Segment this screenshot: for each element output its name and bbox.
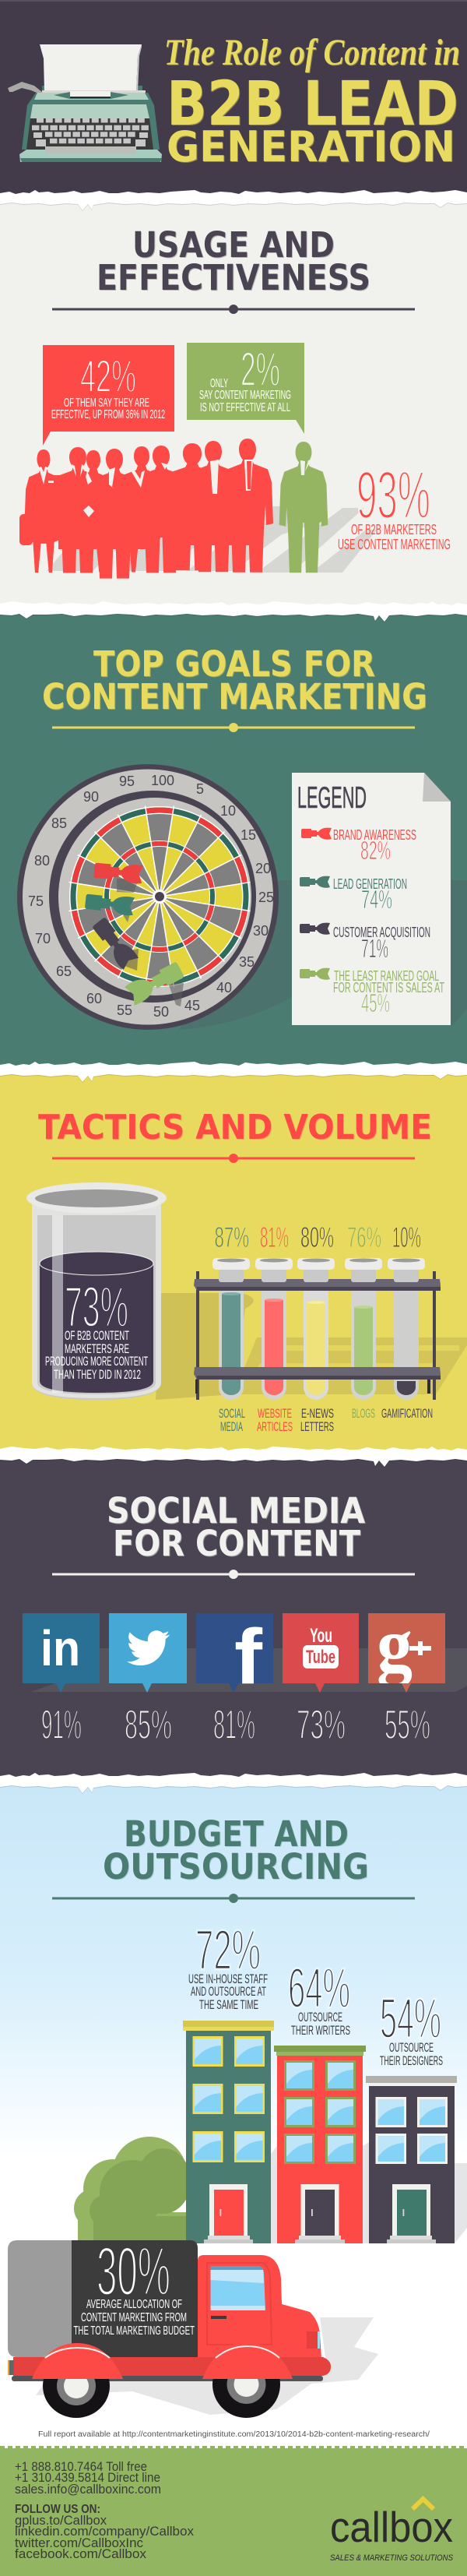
building shadows bbox=[271, 2142, 467, 2243]
contact details: linkedin.com/company/Callbox bbox=[15, 2524, 194, 2539]
heading: usage and effectiveness: EFFECTIVENESS bbox=[97, 257, 370, 298]
crowd shirt details bbox=[39, 449, 253, 517]
dart: green bbox=[124, 959, 185, 1006]
board scale numbers: 100 bbox=[151, 773, 174, 788]
chart labels bbox=[219, 1406, 433, 1434]
bubble: 2 percent: SAY CONTENT MARKETING bbox=[199, 389, 291, 402]
stat: 73 percent bbox=[45, 1276, 148, 1382]
stat: 73 percent: PRODUCING MORE CONTENT bbox=[45, 1354, 148, 1369]
social percentages: 81% bbox=[213, 1702, 255, 1748]
tube necks bbox=[219, 1268, 419, 1282]
stat: 64 percent: THEIR WRITERS bbox=[291, 2024, 350, 2038]
board scale numbers: 45 bbox=[184, 998, 200, 1013]
bubble: 2 percent: ONLY bbox=[210, 377, 228, 390]
legend title: LEGEND bbox=[297, 781, 367, 815]
chart: test tube percentages bbox=[215, 1221, 421, 1253]
stat: 30 percent: 30% bbox=[97, 2232, 170, 2310]
stat: 30 percent: THE TOTAL MARKETING BUDGET bbox=[73, 2324, 195, 2338]
board scale numbers: 25 bbox=[258, 890, 274, 905]
board scale numbers: 75 bbox=[28, 893, 44, 909]
legend item: brand awareness bbox=[301, 827, 416, 865]
legend item: customer acquisition: 71% bbox=[361, 934, 388, 963]
heading: top goals bbox=[42, 643, 427, 717]
panel: budget and outsourcing bbox=[0, 1782, 467, 2452]
board and paper shadow bbox=[179, 880, 467, 1030]
contact details: gplus.to/Callbox bbox=[15, 2513, 107, 2528]
panel: legend bbox=[292, 773, 451, 1025]
stat: 30 percent bbox=[73, 2232, 195, 2338]
icon: facebook bbox=[196, 1613, 273, 1700]
bubble: 2 percent bbox=[187, 343, 304, 434]
board scale numbers: 10 bbox=[220, 803, 236, 819]
contact details: FOLLOW US ON: bbox=[15, 2503, 100, 2516]
stat: 73 percent: 73% bbox=[65, 1276, 128, 1339]
source note: Full report available at http://contentmarketinginstitute.com/2013/10/2014-b2b-content-marketing-research/ bbox=[38, 2430, 430, 2439]
legend item: lead generation: LEAD GENERATION bbox=[333, 876, 407, 892]
stat: 73 percent: OF B2B CONTENT bbox=[65, 1328, 129, 1343]
icon: youtube: You bbox=[310, 1625, 332, 1647]
illustration: beaker bbox=[26, 1182, 167, 1400]
board scale numbers: 15 bbox=[241, 827, 256, 843]
tube: social media bbox=[219, 1277, 244, 1400]
board scale numbers: 80 bbox=[34, 853, 50, 869]
chart labels: LETTERS bbox=[300, 1419, 334, 1434]
stat: 72 percent: USE IN-HOUSE STAFF bbox=[188, 1972, 268, 1986]
rack shelves bbox=[194, 1279, 441, 1291]
bubble: 42 percent: 42% bbox=[80, 351, 136, 402]
chart: dartboard bbox=[17, 764, 279, 1030]
dart shadows bbox=[117, 879, 184, 1006]
truck wheels bbox=[43, 2351, 280, 2418]
board scale numbers: 85 bbox=[51, 816, 67, 831]
bubble: 42 percent: OF THEM SAY THEY ARE bbox=[64, 396, 149, 410]
panel: tactics and volume bbox=[0, 1071, 467, 1457]
board scale numbers: 90 bbox=[83, 789, 99, 805]
stat: 93 percent bbox=[338, 458, 451, 552]
chart labels: MEDIA bbox=[220, 1419, 243, 1434]
icon: youtube: Tube bbox=[306, 1647, 335, 1668]
illustration: tree bbox=[74, 2137, 191, 2255]
contact details: twitter.com/CallboxInc bbox=[15, 2535, 143, 2550]
chart labels: WEBSITE bbox=[258, 1406, 292, 1421]
tube: gamification bbox=[394, 1277, 419, 1400]
heading: usage and effectiveness bbox=[97, 224, 370, 298]
contact details: +1 310.439.5814 Direct line bbox=[15, 2470, 160, 2485]
icon: youtube bbox=[283, 1613, 359, 1693]
illustration: red crowd bbox=[19, 439, 273, 579]
board scale numbers: 70 bbox=[35, 931, 51, 946]
panel: social media bbox=[0, 1457, 467, 1782]
bubble: 42 percent bbox=[43, 345, 174, 446]
panel: footer bbox=[0, 2447, 467, 2576]
title: generation: GENERATION bbox=[167, 122, 455, 171]
board scale numbers bbox=[28, 773, 274, 1020]
stat: 73 percent: MARKETERS ARE bbox=[65, 1341, 129, 1356]
icon: linkedin: in bbox=[40, 1620, 80, 1676]
icon: typewriter bbox=[8, 44, 162, 162]
chart labels: BLOGS bbox=[352, 1406, 375, 1421]
stat: 73 percent: THAN THEY DID IN 2012 bbox=[54, 1367, 141, 1382]
chart labels: SOCIAL bbox=[219, 1406, 245, 1421]
chart labels: ARTICLES bbox=[257, 1419, 293, 1434]
legend item: sales: 45% bbox=[361, 988, 390, 1017]
dart: red bbox=[93, 861, 143, 884]
icon shadow band bbox=[31, 1648, 467, 1692]
panel: header bbox=[0, 0, 467, 199]
board scale numbers: 65 bbox=[56, 964, 72, 979]
heading: social media bbox=[107, 1490, 365, 1564]
logo: callbox: callbox bbox=[330, 2503, 453, 2551]
truck fenders bbox=[32, 2342, 293, 2379]
tube: e-newsletters bbox=[304, 1277, 328, 1400]
stat: 72 percent: AND OUTSOURCE AT bbox=[191, 1985, 266, 1999]
icon: facebook: f bbox=[234, 1613, 263, 1700]
legend item: customer acquisition bbox=[300, 923, 430, 963]
contact details: sales.info@callboxinc.com bbox=[15, 2482, 161, 2497]
icon: google plus bbox=[368, 1613, 445, 1693]
heading: budget: BUDGET AND bbox=[124, 1813, 349, 1855]
illustration: green man bbox=[279, 442, 328, 573]
dart: teal bbox=[85, 892, 135, 916]
panel: top goals bbox=[0, 611, 467, 1071]
icon: google plus: g bbox=[377, 1602, 413, 1688]
logo: callbox: SALES & MARKETING SOLUTIONS bbox=[330, 2553, 454, 2563]
legend item: lead generation: 74% bbox=[361, 885, 392, 914]
contact details: +1 888.810.7464 Toll free bbox=[15, 2459, 147, 2474]
illustration: building teal bbox=[183, 2021, 274, 2243]
heading: social media: SOCIAL MEDIA bbox=[107, 1490, 365, 1531]
heading: top goals: TOP GOALS FOR bbox=[93, 643, 375, 685]
contact details bbox=[15, 2459, 194, 2561]
board scale numbers: 5 bbox=[196, 781, 204, 797]
board scale numbers: 40 bbox=[216, 980, 232, 996]
board scale numbers: 50 bbox=[153, 1004, 169, 1020]
tube: website articles bbox=[262, 1277, 286, 1400]
heading: top goals: CONTENT MARKETING bbox=[42, 676, 427, 717]
panel: tactics and volume: 10% bbox=[392, 1221, 421, 1253]
legend item: brand awareness: 82% bbox=[360, 836, 391, 865]
board scale numbers: 95 bbox=[119, 774, 135, 789]
heading: tactics: TACTICS AND VOLUME bbox=[38, 1108, 432, 1147]
chart: test tube rack bbox=[194, 1258, 441, 1400]
icon: twitter bbox=[109, 1613, 187, 1693]
social percentages: 73% bbox=[297, 1702, 346, 1748]
social percentages bbox=[41, 1702, 430, 1748]
stat: 30 percent: AVERAGE ALLOCATION OF bbox=[86, 2298, 182, 2311]
legend item: lead generation bbox=[300, 876, 407, 914]
illustration: truck bbox=[8, 2232, 378, 2418]
board scale numbers: 60 bbox=[86, 991, 102, 1006]
contact details: facebook.com/Callbox bbox=[15, 2546, 146, 2561]
icon: linkedin bbox=[23, 1613, 100, 1693]
chart labels: E-NEWS bbox=[301, 1406, 334, 1421]
stat: 30 percent: CONTENT MARKETING FROM bbox=[81, 2311, 187, 2324]
tube caps bbox=[212, 1258, 425, 1270]
board scale numbers: 55 bbox=[117, 1003, 132, 1018]
dart: dark bbox=[90, 916, 139, 971]
board scale numbers: 30 bbox=[253, 923, 269, 939]
chart: test tube percentages: 76% bbox=[347, 1221, 381, 1253]
legend item: sales bbox=[300, 968, 444, 1017]
heading: budget: OUTSOURCING bbox=[103, 1846, 369, 1887]
social percentages: 55% bbox=[384, 1702, 430, 1748]
stat: 64 percent: 64% bbox=[288, 1958, 350, 2020]
heading: usage and effectiveness: USAGE AND bbox=[132, 224, 335, 266]
shadows on wall bbox=[156, 1293, 467, 1400]
stat: 54 percent bbox=[380, 1988, 443, 2068]
heading: social media: FOR CONTENT bbox=[113, 1523, 360, 1564]
stat: 64 percent: OUTSOURCE bbox=[298, 2010, 342, 2025]
stat: 72 percent bbox=[188, 1919, 268, 2012]
bubble: 42 percent: EFFECTIVE, UP FROM 36% IN 2012 bbox=[51, 408, 165, 421]
keyboard keys bbox=[32, 120, 149, 146]
board scale numbers: 20 bbox=[255, 861, 271, 876]
stat: 72 percent: THE SAME TIME bbox=[199, 1998, 258, 2012]
stat: 64 percent bbox=[288, 1958, 350, 2038]
bubble: 2 percent: IS NOT EFFECTIVE AT ALL bbox=[200, 401, 290, 414]
bubble: 2 percent: 2% bbox=[241, 343, 280, 396]
stat: 72 percent: 72% bbox=[195, 1919, 261, 1982]
chart: test tube percentages: 87% bbox=[215, 1221, 249, 1253]
panel: usage and effectiveness bbox=[0, 199, 467, 611]
illustration: building red bbox=[274, 2046, 366, 2243]
heading: budget bbox=[103, 1813, 369, 1887]
illustration: building dark bbox=[366, 2076, 457, 2243]
tube: blogs bbox=[351, 1277, 376, 1400]
social percentages: 91% bbox=[41, 1702, 82, 1748]
board scale numbers: 35 bbox=[239, 954, 255, 970]
chart: test tube percentages: 80% bbox=[300, 1221, 334, 1253]
chart: test tube percentages: 81% bbox=[260, 1221, 289, 1253]
social percentages: 85% bbox=[125, 1702, 172, 1748]
illustration: group shadow bbox=[47, 506, 377, 573]
